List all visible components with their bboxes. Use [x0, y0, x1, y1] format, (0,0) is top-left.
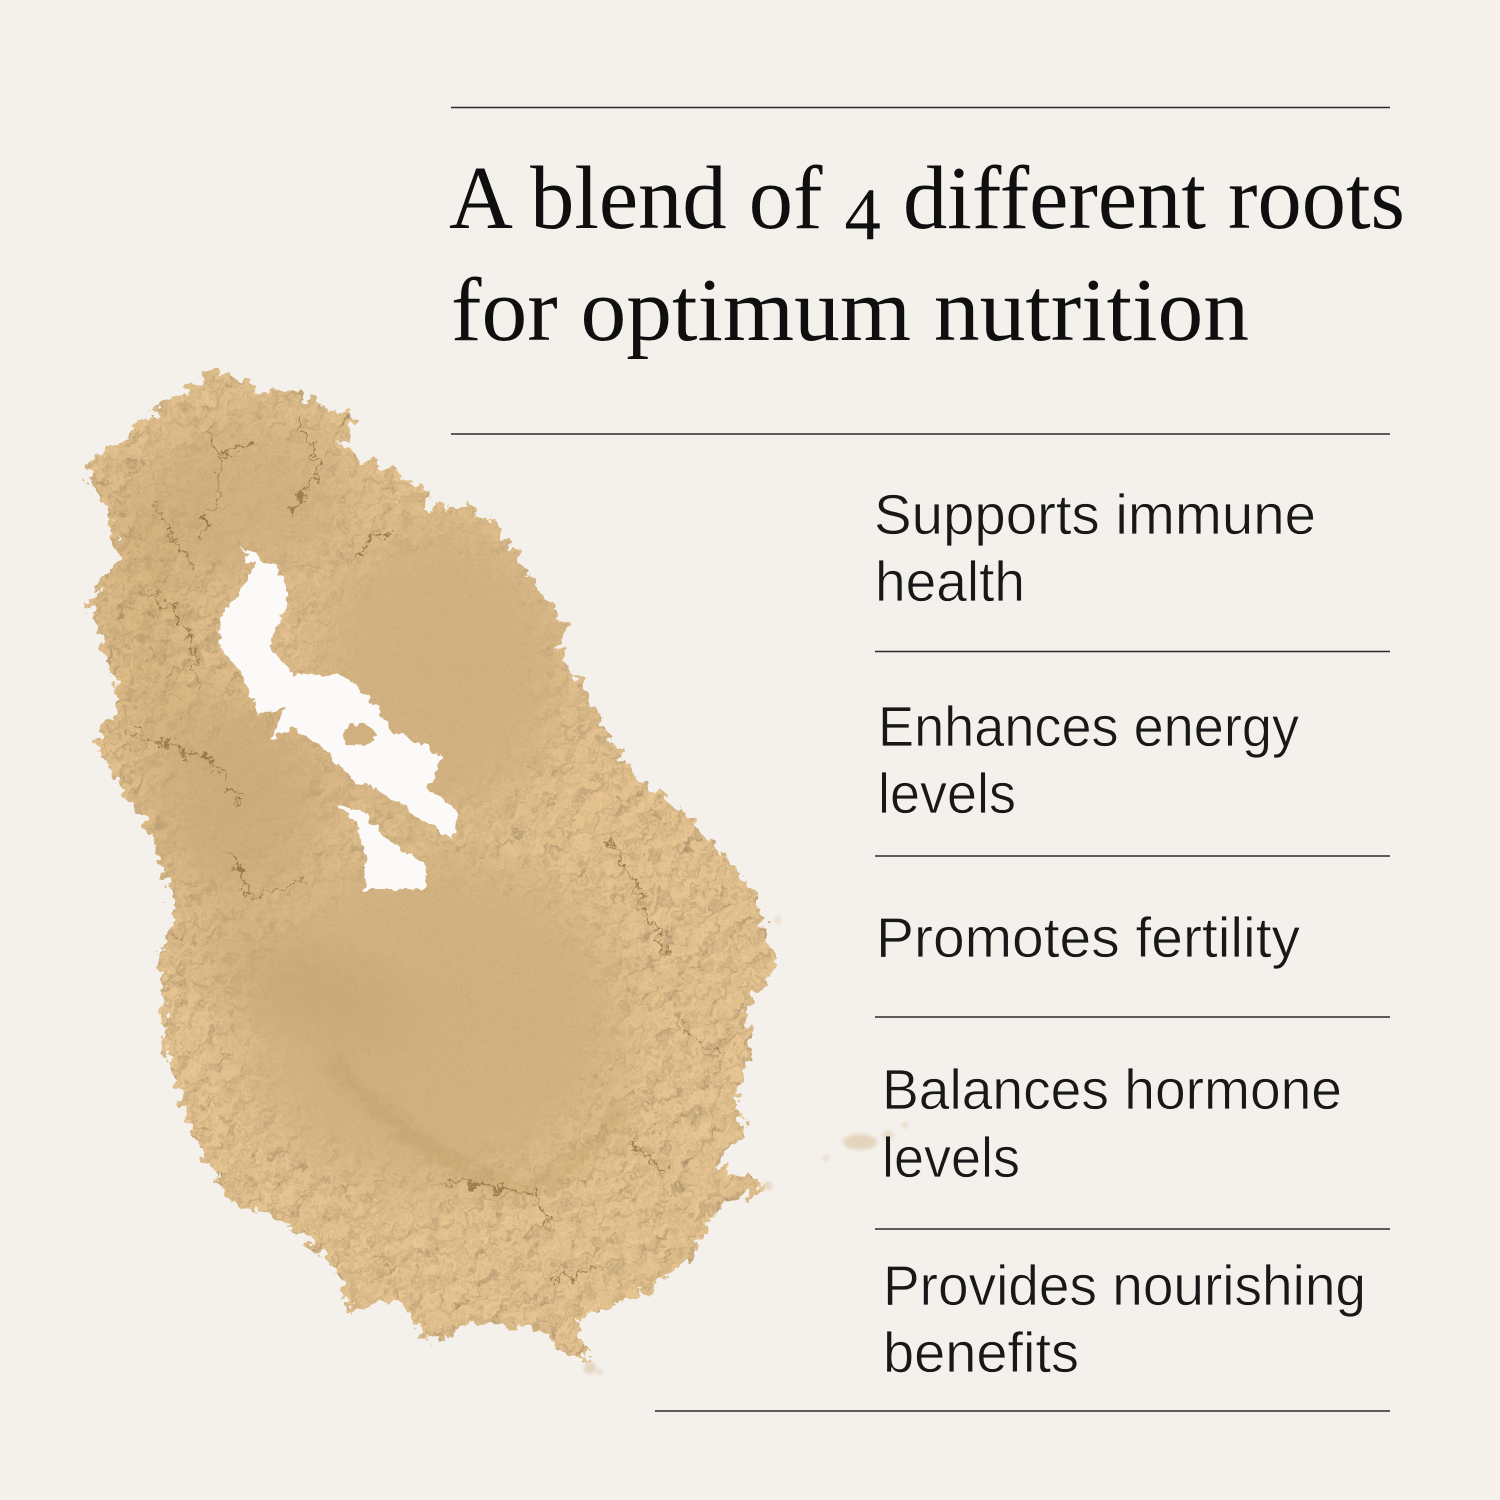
benefit: hormone levels: [882, 1058, 1342, 1190]
powder body: [60, 360, 800, 1380]
small powder island: [343, 725, 377, 745]
benefit: nourishing benefits: [883, 1254, 1366, 1385]
title: 4: [845, 174, 881, 256]
benefit: fertility: Promotes fertility: [876, 906, 1300, 970]
benefit: nourishing benefits: Provides nourishing: [883, 1254, 1366, 1318]
benefit: immune health: [874, 483, 1316, 614]
benefit: energy levels: [878, 695, 1299, 826]
benefit: energy levels: levels: [878, 762, 1016, 826]
title: A blend of: [449, 149, 829, 248]
benefit: energy levels: Enhances energy: [878, 695, 1299, 759]
benefit: hormone levels: Balances hormone: [882, 1058, 1342, 1122]
rule under title: [451, 433, 1390, 435]
benefit: immune health: Supports immune: [874, 483, 1316, 547]
benefit: immune health: health: [875, 550, 1025, 614]
scattered powder specks: [584, 917, 908, 1375]
title: different roots: [881, 149, 1405, 248]
benefit: nourishing benefits: benefits: [883, 1321, 1079, 1385]
title: [449, 149, 1405, 360]
title: for optimum nutrition: [451, 261, 1249, 360]
gaps in the powder: [220, 546, 457, 889]
powder pile image: [60, 360, 908, 1380]
top rule: [451, 106, 1390, 108]
cracks: [130, 420, 720, 1280]
benefit: hormone levels: levels: [882, 1126, 1020, 1190]
benefits list: [655, 483, 1390, 1411]
